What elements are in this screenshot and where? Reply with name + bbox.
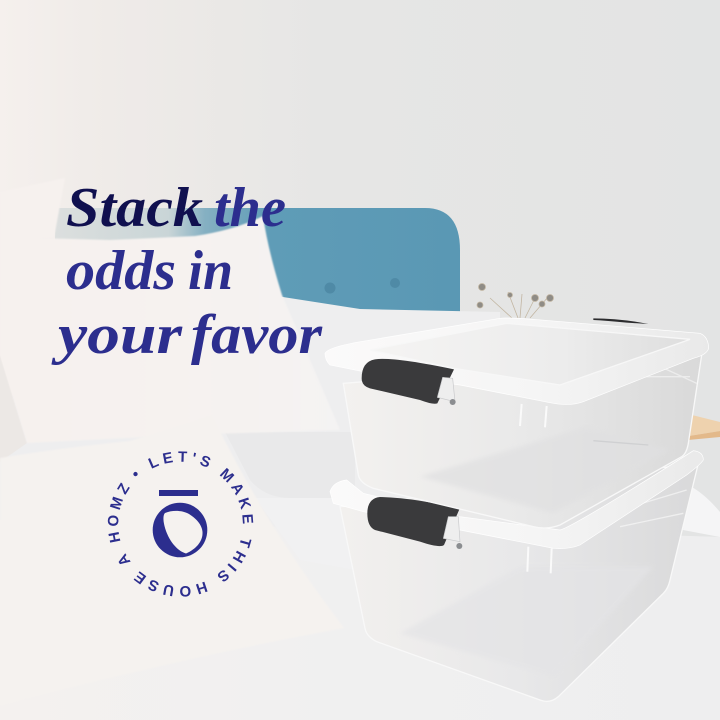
title word: your: your [51,304,183,366]
title word: Stack: Stack [66,177,203,239]
lid inner panel [370,323,690,385]
top-left pillow [0,178,65,240]
top box [325,318,709,528]
left edge shadow [0,355,27,462]
title word: favor: favor [191,304,323,366]
badge logo [108,451,254,597]
title word: odds: odds [66,240,176,302]
top box rib [520,404,547,427]
right pillow [683,486,720,537]
title word: in: in [188,240,233,302]
far handle [593,318,648,324]
bottom box body [340,463,698,701]
headboard [55,208,460,320]
bottom box [330,451,703,701]
title word: the: the [214,177,286,239]
nightstand [688,415,720,440]
bottom box rib [527,547,552,573]
back pillow [0,216,340,443]
top box lid [325,318,709,404]
circular slogan: • LET'S MAKE THIS HOUSE A HOMZ [108,451,254,597]
storage boxes [325,318,709,701]
bottom box rim [330,451,703,549]
title [51,177,323,366]
front pillow [0,415,344,706]
dried flowers [477,284,554,318]
top box body [343,355,702,528]
logo mark [153,490,207,557]
headboard buttons [324,278,400,294]
bed [0,295,720,720]
bottom handle [367,497,462,549]
top handle [362,359,456,405]
